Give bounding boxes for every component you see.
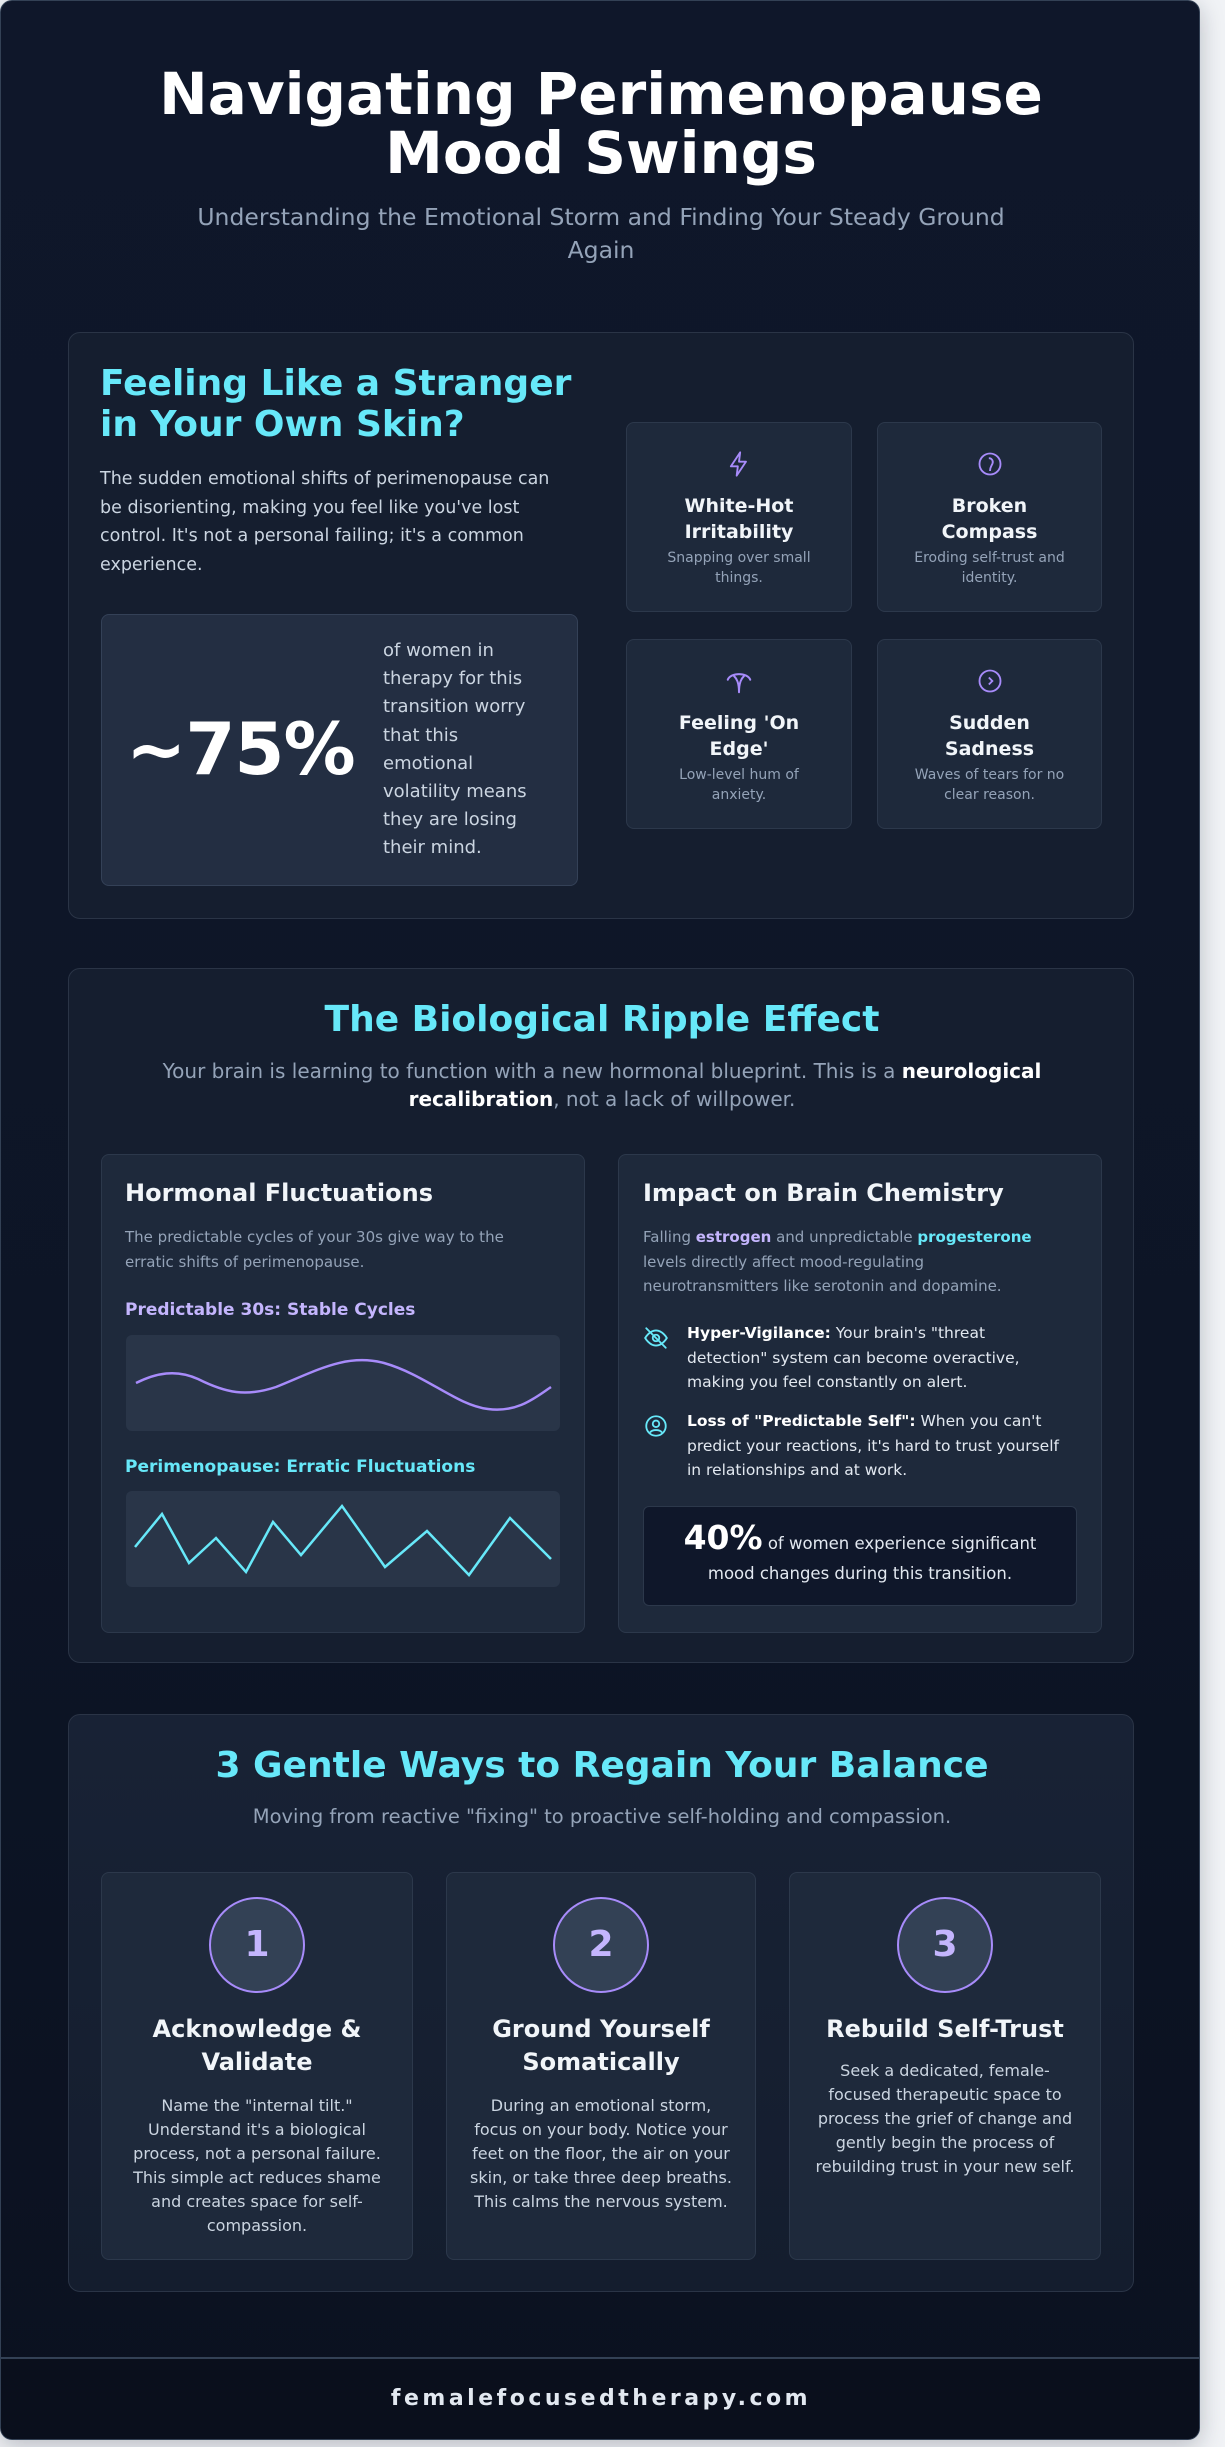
icon: sad circle (978, 670, 1002, 692)
card: hormonal fluctuations (101, 1154, 585, 1633)
symptom card: irritability: Snapping over small (667, 550, 811, 566)
step title: Rebuild Self-Trust (826, 2015, 1064, 2043)
footer (1, 2357, 1201, 2441)
symptom card: on edge: Feeling 'On (679, 712, 799, 734)
symptom card: irritability (626, 422, 852, 612)
label: erratic: Perimenopause: Erratic Fluctuations (125, 1457, 475, 1477)
icon: person circle (645, 1415, 667, 1437)
symptom card: sadness: clear reason. (944, 787, 1035, 803)
card heading: Impact on Brain Chemistry (643, 1179, 1004, 1207)
chart: erratic zigzag (126, 1491, 560, 1587)
item: hyper-vigilance: Hyper-Vigilance: Your brain's "threat detection" system can become overactive, making you feel constantly on alert. (687, 1324, 1020, 1391)
step text: During an emotional storm, (491, 2096, 711, 2115)
heading: The Biological Ripple Effect (325, 999, 879, 1040)
symptom card: sadness: Sudden (949, 712, 1030, 734)
subtitle: Moving from reactive "fixing" to proactive self-holding and compassion. (253, 1805, 951, 1828)
step 3 (789, 1872, 1101, 2260)
card heading: Hormonal Fluctuations (125, 1179, 433, 1207)
symptom card: broken compass: Eroding self-trust and (914, 550, 1065, 566)
stat box 75% (101, 614, 578, 886)
number badge: 2 (588, 1924, 614, 1965)
panel: feeling like a stranger (68, 332, 1134, 919)
icon: edge (726, 673, 752, 694)
number badge: 3 (932, 1924, 958, 1965)
heading: 3 Gentle Ways to Regain Your Balance (215, 1745, 989, 1786)
card text: Falling estrogen and unpredictable progesterone levels directly affect mood-regulating neurotransmitters like serotonin and dopamine. (643, 1228, 1032, 1295)
symptom card: broken compass: Broken (952, 495, 1027, 517)
step text: Name the "internal tilt." Understand it's a biological process, not a personal failure. This simple act reduces shame and creates space for self-compassion. (133, 2096, 381, 2235)
intro text: The sudden emotional shifts of perimenopause can be disorienting, making you feel like you've lost control. It's not a personal failing; it's a common experience. (100, 469, 549, 574)
step 2 (446, 1872, 756, 2260)
chart: stable wave (126, 1335, 560, 1431)
symptom card: sadness (877, 639, 1102, 829)
stat number: ~75% (126, 707, 355, 791)
title: Navigating Perimenopause (159, 60, 1043, 128)
step title: Acknowledge & (153, 2015, 361, 2043)
stat box 40%: 40% of women experience significant mood changes during this transition. (684, 1518, 1036, 1583)
step title: Somatically (522, 2048, 680, 2076)
symptom card: on edge: Low-level hum of (679, 767, 799, 783)
number badge: 1 (244, 1924, 270, 1965)
panel: 3 gentle ways (68, 1714, 1134, 2292)
symptom card: on edge (626, 639, 852, 829)
step text: focus on your body. Notice your feet on the floor, the air on your skin, or take three deep breaths. This calms the nervous system. (470, 2120, 732, 2211)
number badge (553, 1897, 649, 1993)
symptom card: on edge: anxiety. (712, 787, 766, 803)
stat box 40% (643, 1506, 1077, 1606)
symptom card: irritability: things. (715, 570, 763, 586)
step text: Seek a dedicated, female-focused therapeutic space to process the grief of change and gently begin the process of rebuilding trust in your new self. (816, 2061, 1074, 2176)
icon: lightning (730, 451, 747, 477)
label: stable: Predictable 30s: Stable Cycles (125, 1300, 415, 1320)
step title: Ground Yourself (492, 2015, 710, 2043)
panel: biological ripple effect (68, 968, 1134, 1663)
symptom card: broken compass: Compass (942, 521, 1037, 543)
symptom card: broken compass (877, 422, 1102, 612)
symptom card: irritability: Irritability (685, 521, 793, 543)
item: predictable self: Loss of "Predictable Self": When you can't predict your reactions, it's hard to trust yourself in relationships and at work. (687, 1412, 1059, 1479)
number badge (897, 1897, 993, 1993)
symptom card: sadness: Waves of tears for no (915, 767, 1064, 783)
symptom card: sadness: Sadness (945, 738, 1034, 760)
card text: The predictable cycles of your 30s give way to the erratic shifts of perimenopause. (125, 1228, 504, 1271)
subtitle: Understanding the Emotional Storm and Finding Your Steady Ground Again (197, 203, 1005, 264)
subtitle: Your brain is learning to function with a new hormonal blueprint. This is a neurological recalibration, not a lack of willpower. (163, 1059, 1041, 1111)
symptom card: irritability: White-Hot (685, 495, 793, 517)
step title (152, 2015, 361, 2076)
symptom card: broken compass: identity. (962, 570, 1017, 586)
heading (100, 363, 572, 445)
symptom card: on edge: Edge' (710, 738, 768, 760)
icon: compass (978, 452, 1002, 476)
heading: Feeling Like a Stranger (100, 363, 571, 404)
footer: femalefocusedtherapy.com (391, 2386, 811, 2411)
step title (492, 2015, 710, 2076)
icon: eye off (644, 1327, 668, 1349)
step 1 (101, 1872, 413, 2260)
heading: in Your Own Skin? (100, 404, 465, 445)
number badge (209, 1897, 305, 1993)
card: brain chemistry (618, 1154, 1102, 1633)
title (159, 60, 1043, 187)
step title: Validate (201, 2048, 313, 2076)
stat text: of women in therapy for this transition worry that this emotional volatility means they are losing their mind. (383, 640, 527, 858)
title: Mood Swings (385, 119, 817, 187)
